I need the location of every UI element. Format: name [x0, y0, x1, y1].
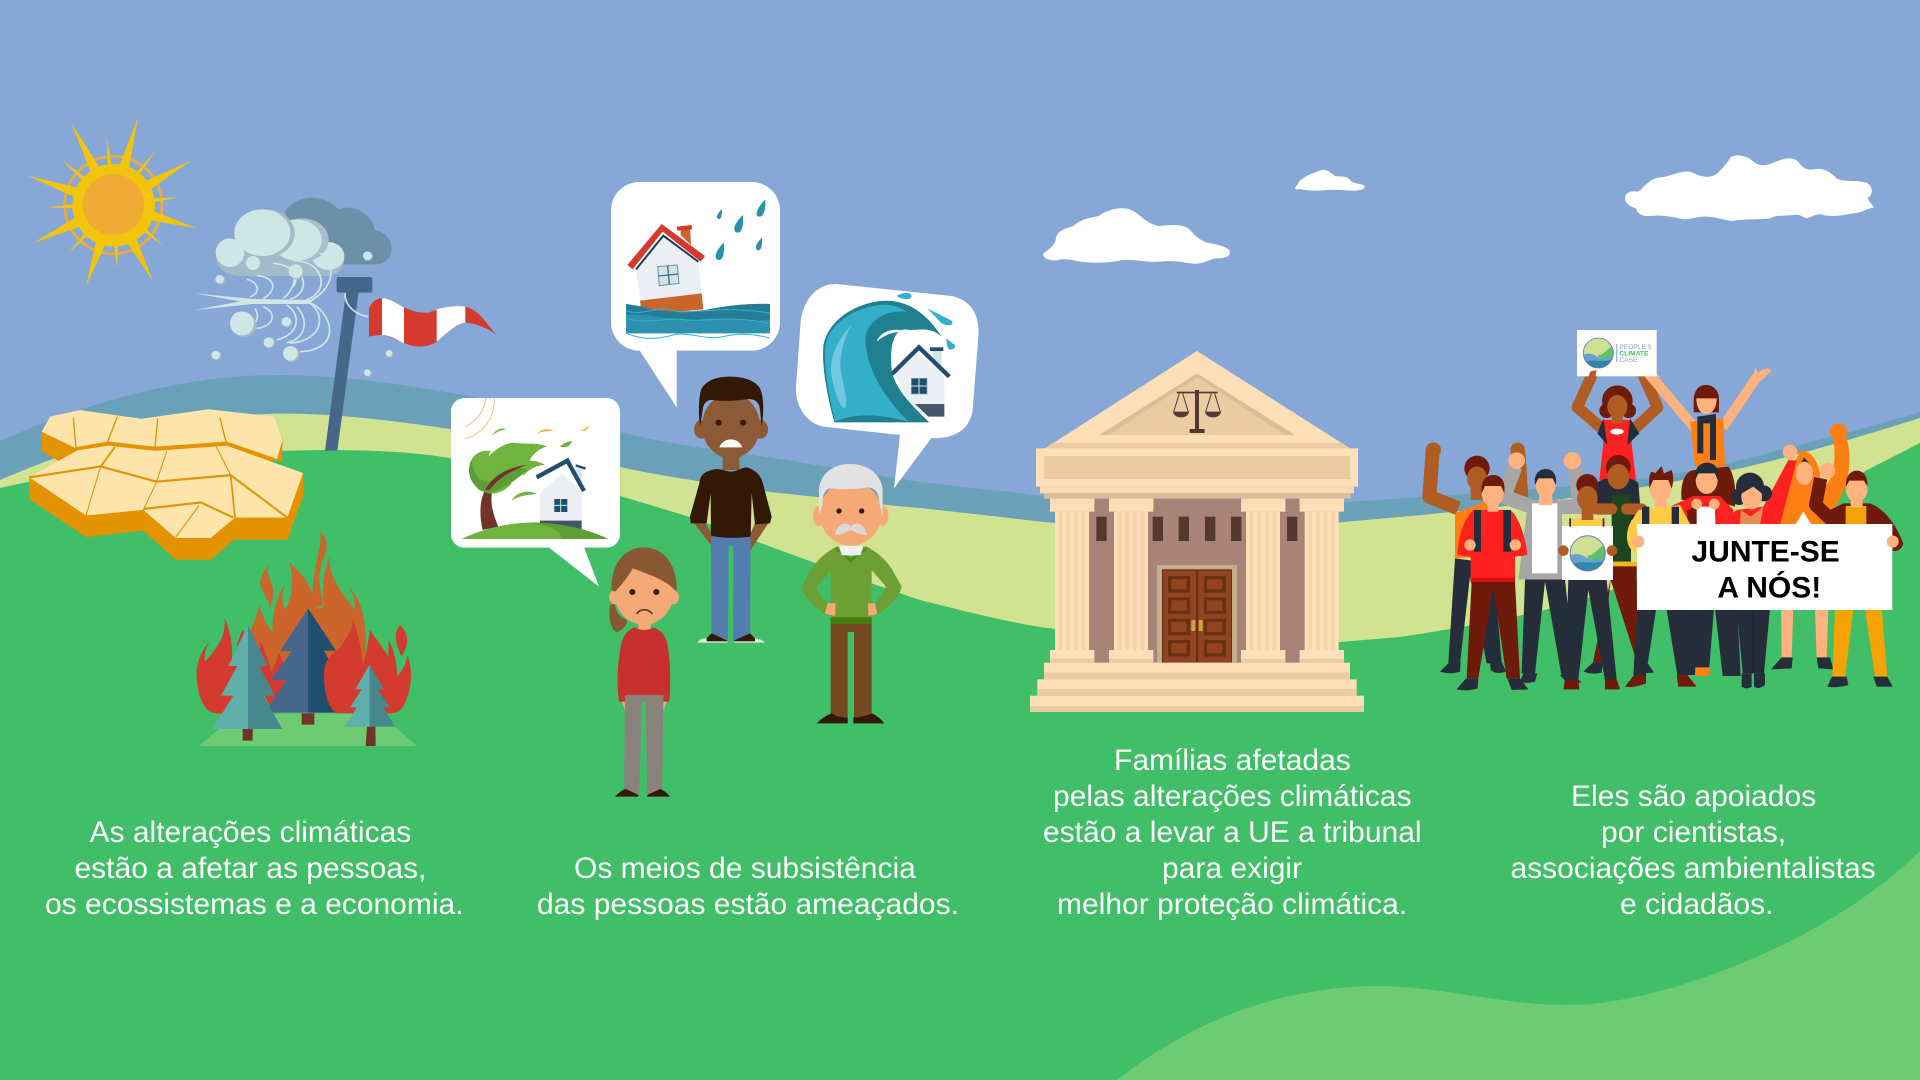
- bent tree: [469, 443, 547, 530]
- caption: families in court: pelas alterações climáticas: [1053, 780, 1412, 813]
- speech bubble: flood: [611, 182, 780, 407]
- round logo: [1570, 536, 1605, 571]
- speech bubble: storm: [451, 398, 620, 587]
- supporter: rear man carrying woman, green shirt: [1583, 455, 1654, 674]
- cloud: large: [1625, 155, 1874, 221]
- upper plate: [42, 409, 282, 462]
- caption: supporters: e cidadãos.: [1620, 888, 1773, 921]
- banner: join us: A NÓS!: [1717, 570, 1821, 604]
- right pine: [344, 664, 395, 746]
- door: [1157, 565, 1237, 663]
- red flame left: [197, 618, 267, 713]
- caption: supporters: por cientistas,: [1601, 816, 1786, 849]
- middle hills pale green: [0, 414, 1920, 1080]
- house: [892, 347, 949, 417]
- sign: People's Climate Case: PEOPLE'S: [1619, 344, 1652, 351]
- orange flames: [248, 532, 366, 687]
- caption: supporters: [1510, 780, 1876, 921]
- foreground hill green: [0, 443, 1920, 1080]
- sign: People's Climate Case: [1577, 330, 1657, 376]
- court building: [1030, 351, 1364, 712]
- supporter: woman with curly dark hair: [1718, 445, 1797, 688]
- bottom right light green hill: [1117, 851, 1920, 1080]
- water: [626, 304, 770, 338]
- caption: families in court: melhor proteção climática.: [1057, 888, 1407, 921]
- pole: [325, 292, 359, 451]
- icon: cracked dry earth: [29, 409, 303, 560]
- speech bubble: tsunami: [796, 284, 979, 488]
- supporter: front-left man in red sweater: [1457, 475, 1528, 690]
- left pine: [212, 625, 282, 741]
- columns: [1050, 499, 1344, 663]
- scales of justice icon: [1173, 390, 1221, 433]
- cloud: medium: [1043, 170, 1365, 264]
- icon: forest fire: [197, 532, 417, 746]
- crowd of supporters: [1426, 330, 1903, 690]
- man figure: [690, 377, 772, 643]
- caption: climate impacts: os ecossistemas e a economia.: [45, 888, 464, 921]
- woman figure: [609, 547, 679, 797]
- banner: join us: [1632, 524, 1899, 610]
- caption: families in court: Famílias afetadas: [1114, 744, 1351, 777]
- older man figure: [802, 464, 902, 723]
- supporter: man in brown jacket and yellow trousers: [1816, 463, 1903, 687]
- sign: People's Climate Case: CLIMATE: [1619, 351, 1649, 358]
- caption: climate impacts: As alterações climáticas: [90, 816, 411, 849]
- icon: sun: [26, 115, 198, 288]
- entablature: [1036, 448, 1358, 487]
- icon: storm clouds, wind and windsock: [195, 198, 497, 451]
- caption: supporters: associações ambientalistas: [1510, 852, 1876, 885]
- windsock: [369, 298, 497, 347]
- supporter: right rear woman in orange hoodie: [1770, 423, 1850, 669]
- supporter: woman with raised arms, orange top: [1642, 367, 1772, 467]
- supporter: man in yellow sweater: [1625, 466, 1697, 687]
- banner: join us: JUNTE-SE: [1692, 536, 1840, 569]
- pediment: [1045, 351, 1350, 448]
- wall: [1089, 499, 1305, 663]
- sign: People's Climate Case: CASE: [1619, 357, 1638, 364]
- wind swirls: [247, 253, 368, 352]
- caption: livelihoods: [537, 852, 959, 921]
- caption: livelihoods: Os meios de subsistência: [574, 852, 916, 885]
- lower plate: [29, 446, 303, 560]
- hill: [462, 523, 608, 539]
- wave: [823, 301, 942, 422]
- supporter: man with raised fist, orange vest: [1426, 442, 1525, 673]
- caption: climate impacts: [45, 816, 464, 921]
- caption: families in court: [1043, 744, 1422, 921]
- house on water: [627, 224, 705, 315]
- caption: supporters: Eles são apoiados: [1571, 780, 1816, 813]
- red flame right: [324, 618, 411, 713]
- caption: climate impacts: estão a afetar as pessoas,: [74, 852, 426, 885]
- pale cloud: [216, 209, 344, 276]
- caption: families in court: para exigir: [1162, 852, 1302, 885]
- far hills teal: [0, 375, 1920, 1080]
- house: [537, 461, 586, 532]
- supporter: man with gray jacket: [1504, 452, 1582, 683]
- supporter: man in white shirt with long-haired rider: [1670, 463, 1741, 676]
- supporter: woman with round logo sign: [1558, 474, 1620, 689]
- caption: livelihoods: das pessoas estão ameaçados.: [537, 888, 959, 921]
- rain drops: [716, 199, 765, 260]
- supporter: woman on shoulders, red top: [1577, 373, 1658, 480]
- steps: [1030, 663, 1364, 712]
- hail stones: [211, 251, 394, 377]
- caption: families in court: estão a levar a UE a tribunal: [1043, 816, 1422, 849]
- centre pine: [265, 608, 347, 725]
- dark storm cloud: [285, 198, 392, 264]
- windows: [1096, 517, 1297, 541]
